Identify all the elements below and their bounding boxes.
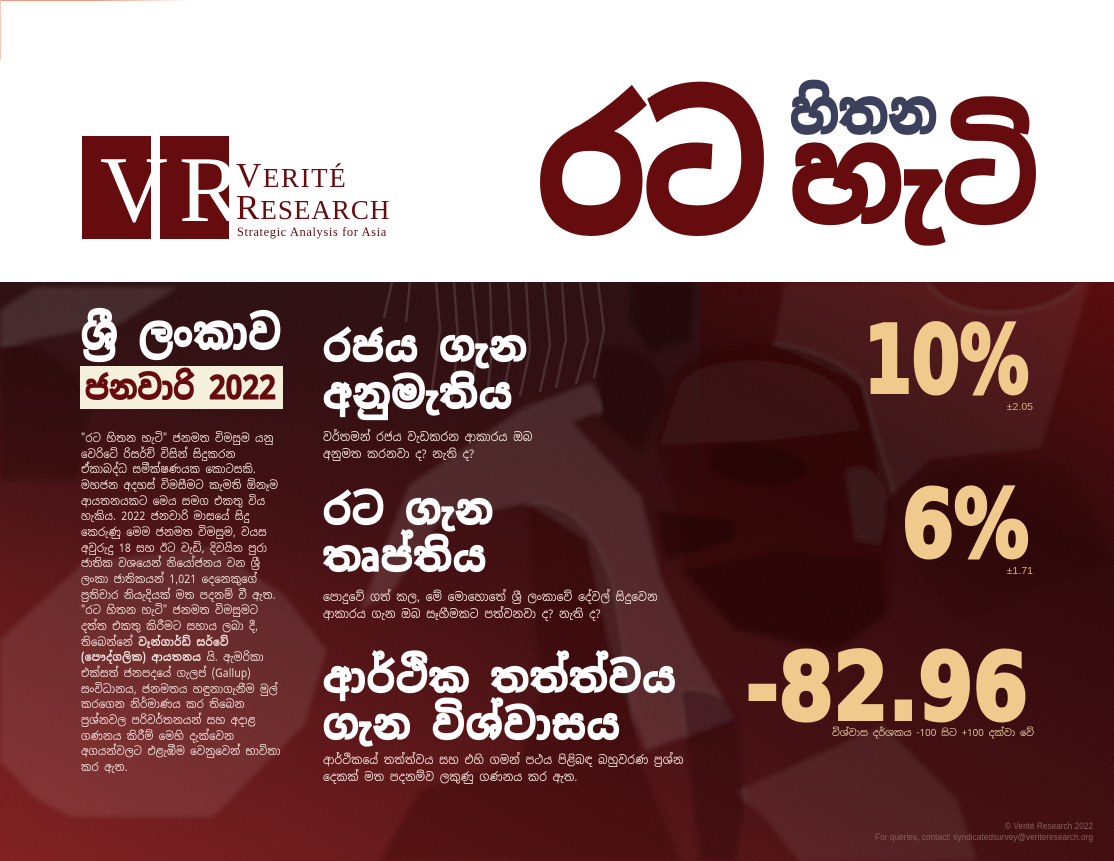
panel: country satisfaction heading: රට ගැන: [323, 483, 494, 537]
panel: government approval heading: අනුමැතිය: [323, 367, 513, 421]
question text: economic confidence: [323, 752, 684, 785]
question text: economic confidence: ආර්ථිකයේ තත්ත්වය සහ එහි ගමන් පථය පිළිබඳ බහුවරණ ප්‍රශ්න: [323, 752, 684, 768]
intro text block: ආයතනයකට මෙය සමග එකතු විය: [81, 494, 265, 509]
intro text block: ලංකා ජාතිකයන් 1,021 දෙනෙකුගේ: [81, 572, 257, 587]
question text: country satisfaction: [323, 589, 658, 622]
intro text block: ජාතික වශයෙන් නියෝජනය වන ශ්‍රී: [81, 556, 260, 571]
intro text block: එක්සත් ජනපදයේ ගැලප් (Gallup): [81, 666, 251, 681]
title word: hithana: හිතන: [790, 72, 937, 152]
patterned shirt stripes: [384, 282, 604, 405]
question text: country satisfaction: පොදුවේ ගත් කල, මේ මොහොතේ ශ්‍රී ලංකාවේ දේවල් සිදුවෙන: [323, 589, 658, 605]
panel: economic confidence heading: [323, 650, 677, 752]
question text: government approval: වර්තමන් රජය වැඩකරන ආකාරය ඔබ: [323, 429, 533, 445]
intro text block: "රට හිතන හැටි" ජනමත විමසුමට: [81, 603, 258, 618]
intro text block: (පෞද්ගලික) ආයතනය යි. ඇමරිකා: [81, 650, 264, 665]
intro text block: ගණනය කිරීම් මෙහි දැක්වෙන: [81, 729, 234, 744]
logo: Verité Research: R: [179, 138, 242, 242]
logo: Verité Research: VERITÉ: [236, 156, 347, 195]
panel: economic confidence heading: ගැන විශ්වාසය: [323, 698, 621, 752]
panel: country satisfaction heading: [323, 483, 494, 584]
stat note: confidence index range: විශ්වාස දර්ශකය -100 සිට +100 දක්වා වේ: [832, 726, 1034, 739]
intro text block: තිබෙන්නේ වෑන්ගාර්ඩ් සර්වේ: [81, 635, 229, 650]
question text: country satisfaction: ආකාරය ගැන ඔබ සෑහීමකට පත්වනවා ද? නැති ද?: [323, 606, 601, 622]
logo: Verité Research: [82, 136, 390, 242]
panel: economic confidence heading: ආර්ථික තත්ත්වය: [323, 651, 677, 705]
intro text block: දත්ත එකතු කිරීමට සහාය ලබා දී,: [81, 619, 258, 634]
intro text block: වෙරිටේ රිසර්ච් විසින් සිදුකරන: [81, 447, 235, 462]
intro text block: කරගෙන නිර්මාණය කර තිබෙන: [81, 697, 245, 712]
intro text block: කර ඇත.: [81, 760, 128, 775]
question text: economic confidence: දෙකක් මත පදනම්ව ලකුණු ගණනය කර ඇත.: [323, 769, 578, 785]
intro text block: ප්‍රශ්නවල පරිවර්තනයන් සහ අදාළ: [81, 713, 256, 728]
intro text block: අගයන්වලට එළැඹීම වෙනුවෙන් භාවිතා: [81, 744, 281, 759]
heading: Sri Lanka: ශ්‍රී ලංකාව: [81, 303, 282, 363]
question text: government approval: අනුමත කරනවා ද? නැති ද?: [323, 446, 474, 462]
question text: government approval: [323, 429, 533, 462]
intro text block: [81, 431, 281, 775]
stat: 10 percent: 10%: [864, 306, 1029, 414]
panel: government approval heading: [323, 320, 528, 421]
intro text block: හැකිය. 2022 ජනවාරි මාසයේ සිදු: [81, 509, 250, 524]
stat: 6 percent: 6%: [902, 470, 1029, 578]
panel: government approval heading: රජය ගැන: [323, 320, 528, 374]
title: rata hithana hati: [538, 54, 1038, 282]
panel: country satisfaction heading: තෘප්තිය: [323, 530, 487, 584]
footer credits: [875, 821, 1093, 843]
intro text block: "රට හිතන හැටි" ජනමත විමසුම යනු: [81, 431, 274, 446]
footer credits: © Verité Research 2022: [1005, 821, 1093, 832]
intro text block: අවුරුදු 18 සහ ඊට වැඩි, දිවයින පුරා: [81, 541, 267, 556]
stat: 6 percent: ±1.71: [1007, 565, 1033, 577]
date badge: ජනවාරි 2022: [85, 366, 276, 409]
logo: Verité Research: Strategic Analysis for Asia: [237, 225, 387, 239]
title word: rata: රට: [538, 54, 766, 282]
intro text block: සංවිධානය, ජනමතය හඳුනාගැනීම මුල්: [81, 682, 278, 697]
intro text block: කෙරුණු මෙම ජනමත විමසුම, වයස: [81, 525, 267, 540]
stat: 10 percent: ±2.05: [1007, 401, 1033, 413]
intro text block: මහජන අදහස් විමසීමට කැමති ඕනෑම: [81, 478, 278, 493]
logo: Verité Research: RESEARCH: [236, 188, 390, 227]
top white header band: [0, 0, 1114, 282]
logo: Verité Research: V: [100, 138, 168, 242]
intro text block: ප්‍රතිචාර නියැදියක් මත පදනම් වී ඇත.: [81, 588, 276, 603]
title word: hati: හැටි: [790, 93, 1038, 260]
intro text block: ඒකාබද්ධ සමීක්ෂණයක කොටසකි.: [81, 462, 256, 477]
stat: minus 82.96: -82.96: [746, 633, 1028, 741]
